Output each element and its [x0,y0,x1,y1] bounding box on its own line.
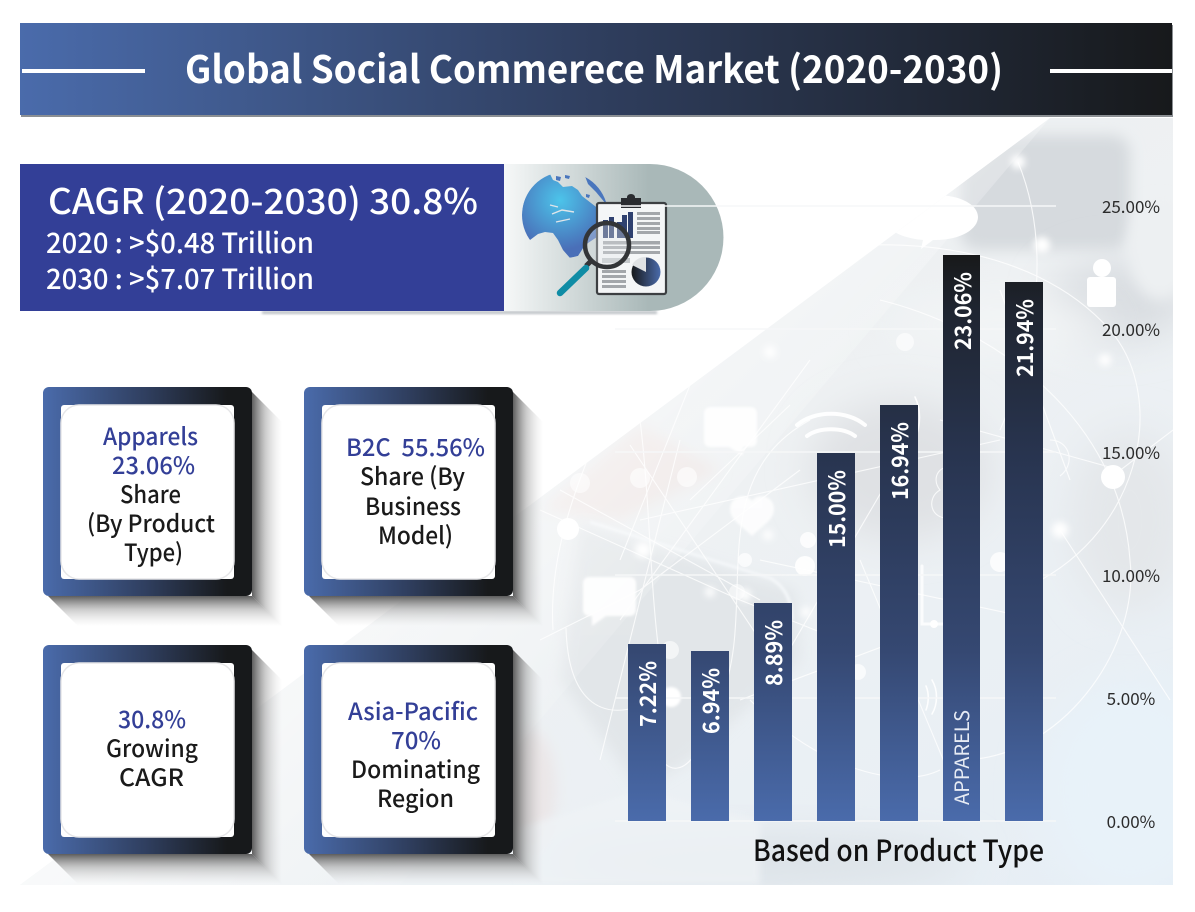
panel: card growing CAGR: 30.8% [118,700,186,735]
panel: card B2C share: B2C 55.56% [346,428,485,463]
bar values [631,272,1040,734]
bar category label: APPARELS [946,710,975,805]
panel: card dominating region: Region [377,779,454,814]
panel: CAGR summary: CAGR (2020-2030) 30.8% [48,174,478,225]
y axis labels: 0.00% [1107,808,1155,833]
icon: speech bubbles, heart, wifi, person [583,195,1116,626]
y axis labels [1102,193,1160,833]
panel: card B2C share: Model) [378,516,453,551]
pie [632,258,660,286]
fade toward the lower left [20,118,1050,885]
panel: card B2C share: Business [365,487,461,522]
bar chart: based on product type [615,193,1160,870]
glowing nodes [557,155,1125,707]
panel: card dominating region: Asia-Pacific [348,692,478,727]
panel: card B2C share: Share (By [360,457,465,492]
panel: card apparels share: Type) [124,533,183,568]
phone silhouette [568,541,794,768]
panel: card dominating region: Dominating [351,750,480,785]
y axis labels: 5.00% [1107,685,1155,710]
y axis labels: 15.00% [1102,439,1160,464]
icon: globe and report with magnifier [522,171,666,294]
y axis labels: 25.00% [1102,193,1160,218]
pink hand tint [570,448,702,511]
panel: card apparels share: (By Product [87,504,215,539]
panel: card growing CAGR [43,645,282,884]
bar values: 7.22% [631,661,663,727]
report bars [603,212,633,238]
panel: card dominating region [304,645,543,884]
title: Global Social Commerece Market (2020-2030) [185,39,1003,94]
panel: card growing CAGR: Growing [106,729,198,764]
bar values: 16.94% [883,422,915,500]
network lines [540,162,1173,800]
panel: card dominating region: 70% [391,721,441,756]
bars [628,644,666,821]
panel: CAGR summary: 2020 : >$0.48 Trillion [46,222,314,262]
y axis labels: 20.00% [1102,316,1160,341]
bar values: 21.94% [1008,299,1040,377]
panel: card apparels share: Apparels [103,417,198,452]
panel: card apparels share: Share [120,475,181,510]
globe [522,174,606,258]
clipboard [597,203,666,294]
bar values: 8.89% [757,620,789,686]
panel: card apparels share: 23.06% [112,446,195,481]
title banner [20,23,1173,117]
panel: card B2C share [304,387,543,626]
bar values: 6.94% [694,668,726,734]
cuff band at the bottom [533,822,758,883]
panel: card growing CAGR: CAGR [119,758,184,793]
panel: card apparels share [43,387,282,626]
bar values: 23.06% [946,272,978,350]
bar values: 15.00% [820,470,852,548]
pill background [504,164,723,311]
y axis labels: 10.00% [1102,562,1160,587]
panel: CAGR summary: 2030 : >$7.07 Trillion [46,258,314,298]
x axis title: Based on Product Type [753,828,1044,870]
magnifier [585,223,629,267]
panel: CAGR summary [20,164,723,314]
